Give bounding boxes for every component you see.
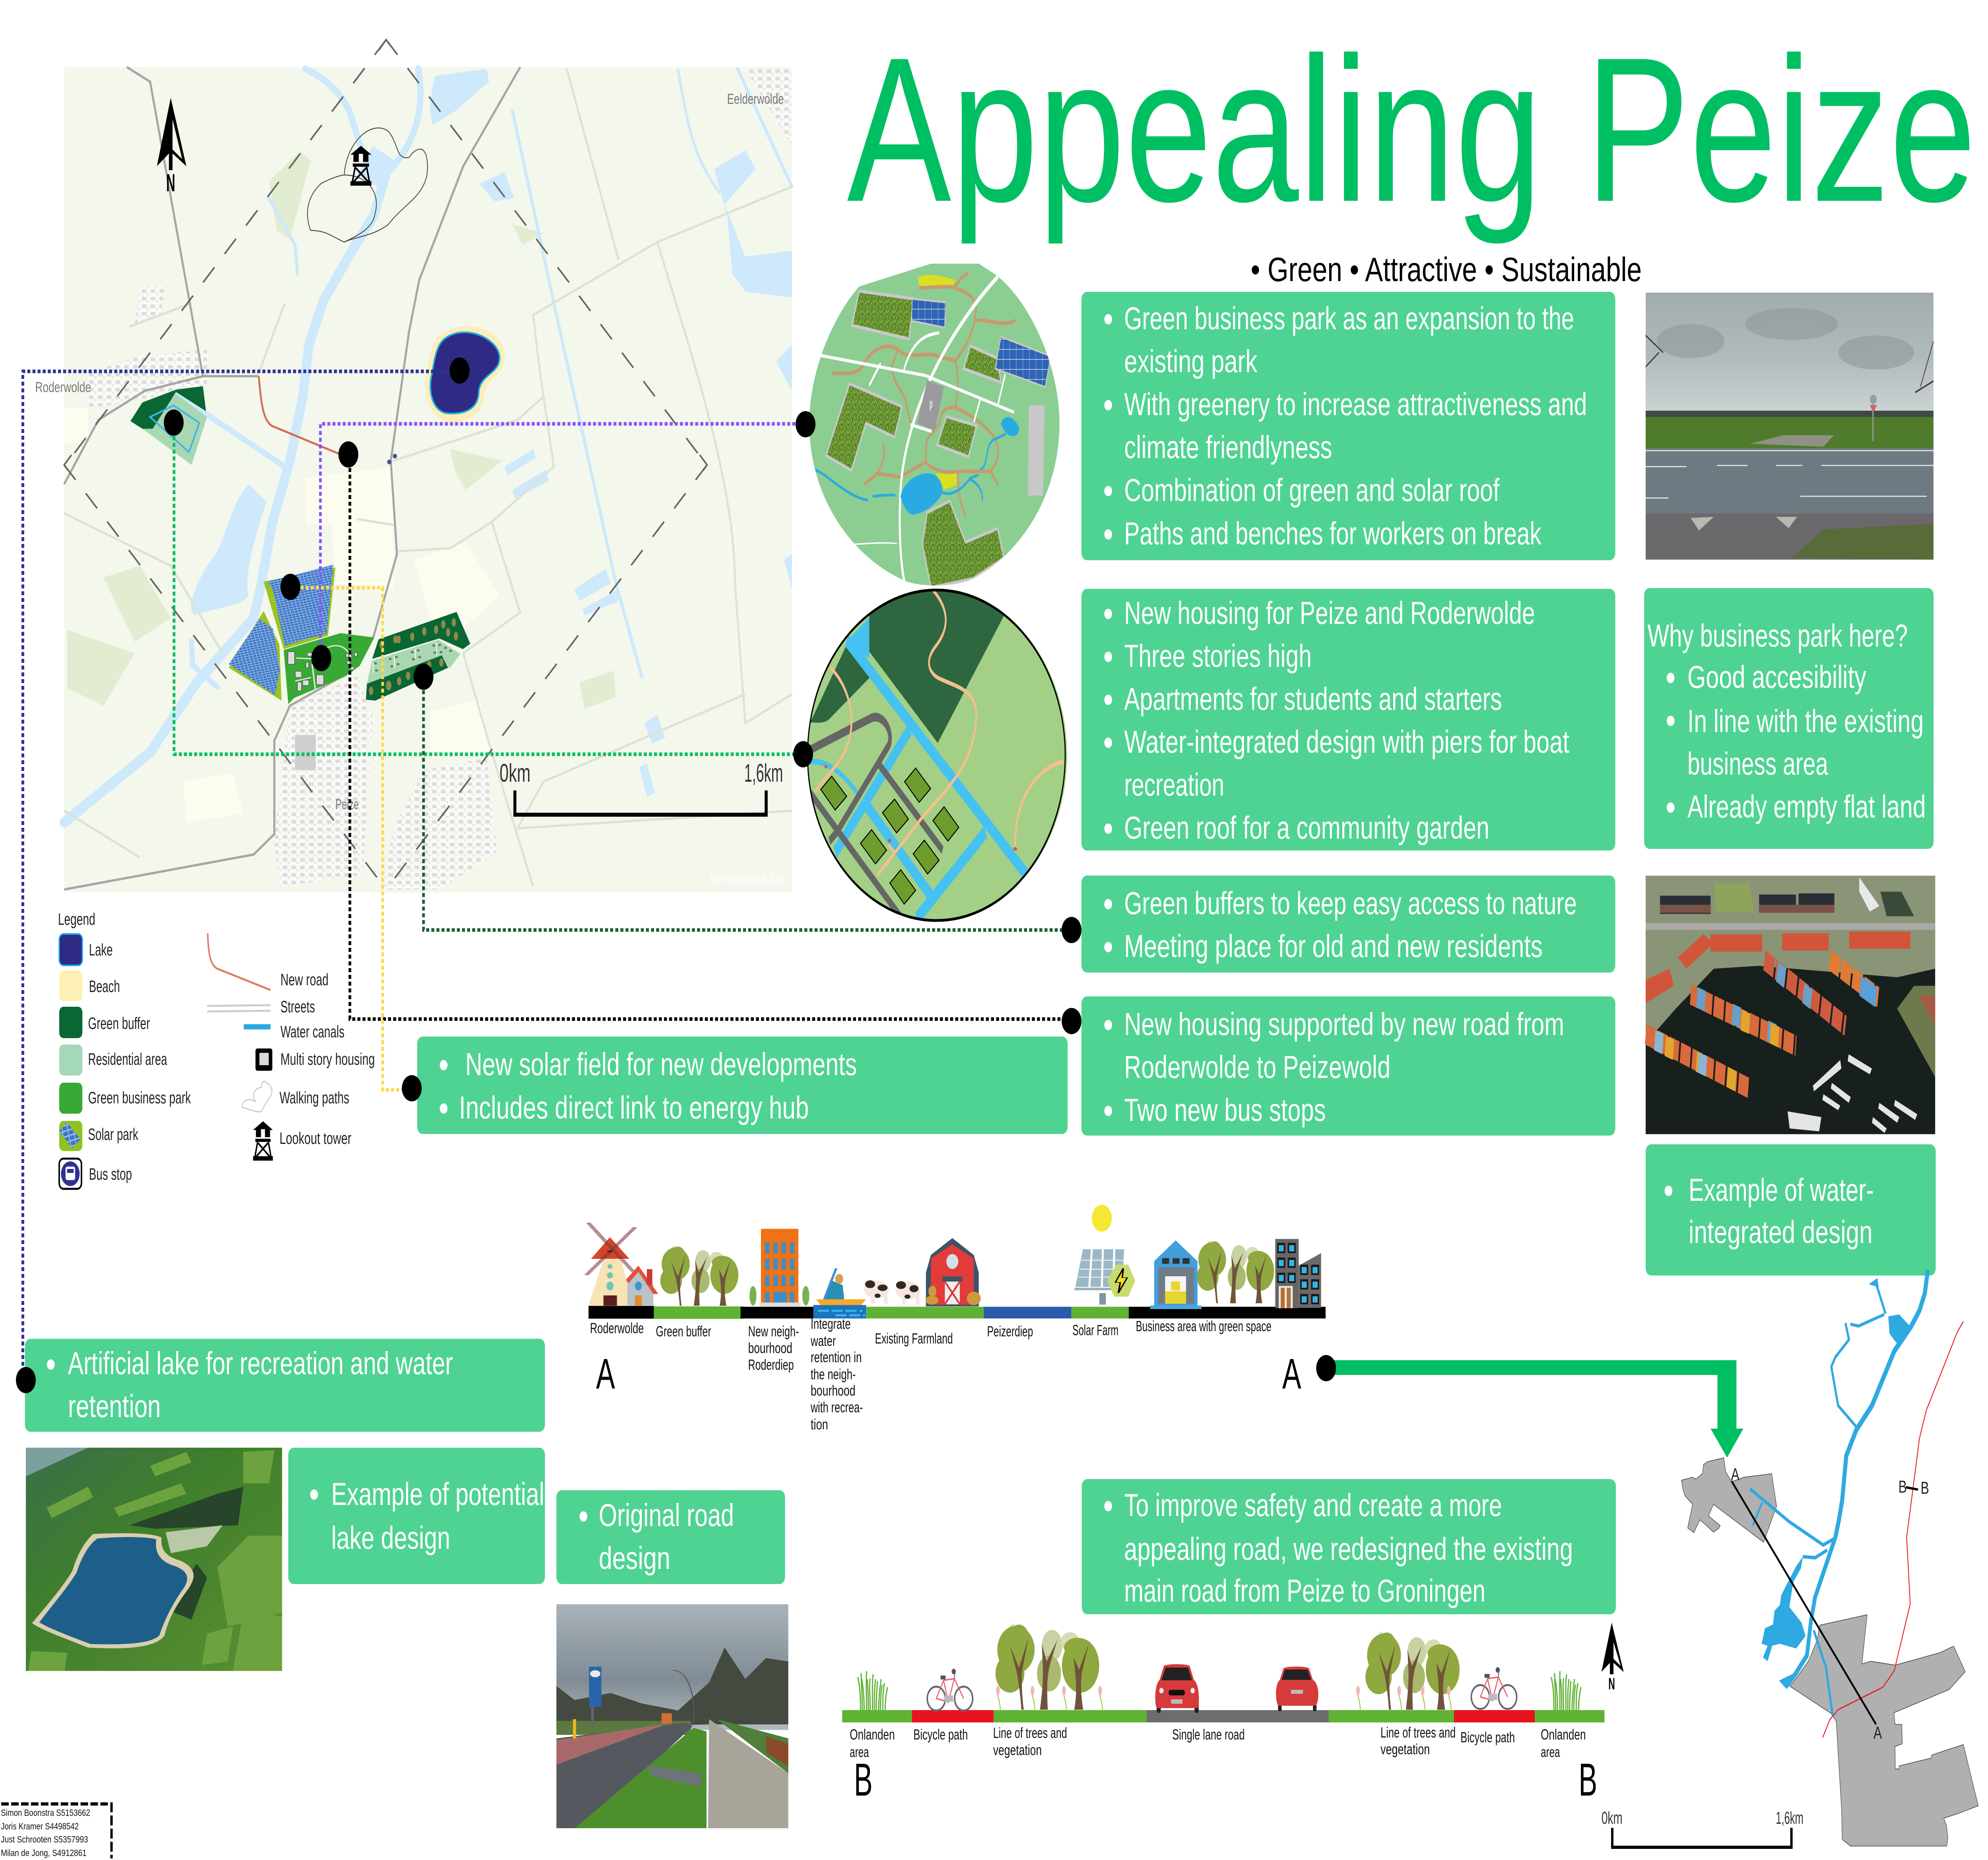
panel: why business park here: business area [1687,746,1828,782]
map place names: Eelderwolde [727,91,784,107]
icon: trees left [996,1624,1099,1710]
section B-B labels: Onlanden [1541,1726,1586,1743]
overview scale bar: 0km [1602,1809,1623,1828]
artificial lake [425,326,505,422]
circle base [808,591,1067,920]
legend: lake [59,934,113,965]
panel: green business park: With greenery to increase attractiveness and [1124,387,1587,422]
water network [1750,1270,1928,1716]
legend title: Legend [58,910,95,928]
panel: solar field: Includes direct link to energy hub [459,1090,809,1126]
section A-A labels: Roderdiep [748,1356,794,1373]
overview map [1681,1270,1978,1846]
map place names [35,91,788,886]
legend: bus stop: Bus stop [89,1165,132,1183]
icon: apartment block [749,1229,809,1307]
legend: multi story housing: Multi story housing [280,1050,375,1068]
solar field south [229,611,282,701]
panel: road redesign: To improve safety and create a more [1124,1488,1502,1523]
new housing with green buffer [366,612,470,701]
icon: trees right [1365,1632,1460,1710]
connector: lake to panel [23,371,460,1380]
panel: why business park here: Why business park here? [1647,618,1908,654]
farmland patches [64,151,616,822]
icon: trees [1197,1241,1274,1303]
section B-B labels [850,1724,1597,1806]
panel: artificial lake: retention [68,1389,161,1424]
connector: new housing [174,423,803,754]
walking paths at lookout [307,128,427,242]
section B-B labels: B [1578,1754,1597,1806]
section A-A labels: A [1282,1350,1301,1398]
legend: lookout tower: Lookout tower [280,1129,351,1147]
map scale bar: 0km [499,759,530,788]
subtitle: • Green • Attractive • Sustainable [1251,250,1642,288]
circle contents: p [930,395,933,411]
overview scale bar [1602,1809,1804,1847]
icon: flowers left [996,1686,1103,1711]
section B-B labels: Onlanden [850,1726,895,1743]
legend: solar park [59,1121,138,1151]
lookout tower icon [350,146,371,186]
legend: green buffer [59,1007,150,1038]
panel: example lake: Example of potential [331,1477,544,1512]
panel: green business park: Combination of green and solar roof [1124,473,1500,508]
section A-A labels: Existing Farmland [875,1330,953,1347]
panel: original road design: design [599,1541,670,1576]
ground bar [588,1305,1326,1319]
panel: original road design: Original road [599,1498,734,1533]
panel: example of water-integrated design: Example of water- [1689,1173,1874,1208]
section B-B labels: Line of trees and [1380,1724,1456,1741]
icon: business building [1150,1241,1202,1309]
legend: green buffer: Green buffer [88,1014,150,1033]
icon: grass right [1551,1671,1581,1710]
panel: solar field [417,1037,1068,1134]
map north arrow [157,98,186,197]
legend: green business park [59,1083,191,1114]
legend: residential area [59,1045,167,1076]
section B-B labels: B [854,1754,873,1806]
panel: artificial lake [25,1339,545,1432]
photo: original road [556,1604,788,1828]
map place names: Peize [336,796,359,812]
cross section A-A [586,1205,1326,1319]
panel: road redesign [1082,1479,1616,1614]
panel: green business park: Paths and benches for workers on break [1124,516,1541,551]
section A-A labels: the neigh- [811,1366,856,1382]
map place names: Roderwolde [35,379,91,395]
title: Appealing Peize [847,15,1976,246]
section B-B labels: vegetation [1380,1741,1430,1757]
icon: solar panel with energy hex [1074,1249,1135,1305]
section B-B labels: vegetation [993,1742,1042,1758]
main road in red [1823,1321,1963,1738]
section B-B labels: Bicycle path [1460,1729,1515,1745]
panel: new housing: Apartments for students and starters [1124,681,1502,717]
legend: green business park: Green business park [88,1088,191,1107]
panel: why business park here: In line with the existing [1687,704,1924,739]
section A-A labels: A [596,1350,615,1398]
bus stops [387,454,397,464]
panel: example of water-integrated design [1646,1144,1936,1276]
overview section labels: A [1731,1465,1740,1484]
panel: green business park: Green business park as an expansion to the [1124,301,1574,336]
green business park [283,633,374,704]
panel: why business park here: Good accesibility [1687,660,1866,695]
map place names: Esri Nederland, AHN [710,873,788,886]
panel: new road: Two new bus stops [1124,1093,1326,1128]
section B-B labels: Bicycle path [913,1726,968,1743]
panel: new housing: recreation [1124,767,1224,803]
connector: green buffer [423,677,1071,930]
circle contents [815,274,1051,588]
icon: cows [864,1280,920,1305]
legend: bus stop [59,1159,132,1189]
panel: green buffers: Green buffers to keep easy access to nature [1124,886,1577,921]
panel: green business park: climate friendlyness [1124,430,1332,465]
section A-A labels: retention in [811,1349,862,1365]
water: rivers and lakes [64,69,792,822]
section A-A labels: with recrea- [810,1399,863,1415]
circle base [809,264,1060,585]
arrow: section A to overview map [1325,1360,1743,1458]
map: solar park, business park, buffer [229,565,470,704]
panel: new housing: Water-integrated design with piers for boat [1124,724,1569,760]
legend: beach: Beach [89,977,120,996]
section A-A labels: tion [811,1416,828,1433]
panel: green business park [1081,292,1615,560]
dashed planning frame [64,40,707,889]
map north arrow: N [166,169,175,197]
section A-A labels [590,1315,1301,1433]
legend: streets: Streets [280,997,315,1016]
section A-A labels: Integrate [811,1315,850,1332]
connector: new road [350,454,1071,1019]
section A-A labels: Roderwolde [590,1320,644,1336]
credits box: Joris Kramer S4498542 [1,1822,79,1832]
section A-A labels: bourhood [811,1382,855,1399]
icon: windmill [586,1223,658,1306]
section B-B labels: area [1541,1744,1560,1760]
legend: water canals [244,1022,344,1041]
legend [58,910,375,1189]
section B-B labels: Line of trees and [993,1724,1067,1741]
overview north arrow: N [1608,1674,1615,1693]
minor roads [64,69,792,887]
photo: empty site along road [1646,293,1934,559]
legend: new road [208,933,328,990]
legend: water canals: Water canals [280,1022,344,1041]
legend: residential area: Residential area [88,1050,167,1068]
legend: lookout tower [253,1121,351,1161]
solar field north [264,565,335,649]
built-up areas [1681,1458,1978,1846]
connector dots [16,357,1336,1393]
map base [64,67,792,893]
panel: new road [1081,996,1615,1136]
overview scale bar: 1,6km [1776,1809,1804,1828]
icon: barn [926,1238,981,1307]
cross section B-B [842,1624,1604,1722]
panel: new road: New housing supported by new road from [1124,1007,1564,1042]
circle outline [808,590,1065,920]
panel: road redesign: appealing road, we redesigned the existing [1124,1532,1573,1567]
panel: example lake [288,1448,545,1584]
section A-A labels: water [810,1332,836,1349]
icon: dark buildings [1275,1239,1321,1308]
legend: lake: Lake [89,940,113,959]
photo: potential lake [26,1448,282,1671]
overview section labels: A [1873,1724,1882,1743]
ground bar [842,1710,1604,1722]
panel: example of water-integrated design: integrated design [1689,1215,1873,1250]
credits box: Simon Boonstra S5153662 [1,1808,90,1818]
legend: walking paths: Walking paths [280,1088,349,1107]
legend: multi story housing [256,1048,375,1071]
section line B-B [1906,1487,1918,1489]
icon: trees [660,1246,738,1306]
overview section labels [1731,1465,1929,1743]
panel: why business park here: Already empty flat land [1687,789,1926,825]
overview north arrow [1602,1623,1624,1693]
icon: flowers right [1356,1686,1451,1711]
panel: new housing: Three stories high [1124,639,1312,674]
panel: new housing: Green roof for a community garden [1124,810,1489,846]
section A-A labels: bourhood [748,1340,792,1356]
legend: walking paths [242,1081,349,1112]
panel: green buffers [1081,876,1615,973]
overview section labels: B [1899,1478,1907,1497]
icon: grass left [858,1671,887,1710]
section A-A labels: New neigh- [748,1323,799,1340]
panel: original road design [556,1490,785,1584]
icon: sun [1092,1205,1112,1232]
icon: car rear [1276,1667,1318,1711]
map: study area [64,40,792,893]
section line A-A [1732,1481,1876,1724]
icon: kayak [816,1268,866,1305]
Roderwolde green buffer and housing [130,386,207,465]
legend: beach [59,971,120,1001]
legend: new road: New road [280,970,328,989]
credits box [1,1804,111,1858]
panel: new road: Roderwolde to Peizewold [1124,1050,1390,1085]
section B-B labels: area [850,1744,869,1760]
icon: bicycle right [1471,1667,1517,1709]
section A-A labels: Solar Farm [1072,1322,1118,1338]
villages [88,69,792,889]
section A-A labels: Peizerdiep [987,1323,1033,1340]
business park concept circle [809,264,1060,588]
panel: green business park: existing park [1124,344,1258,379]
connector: solar field [290,588,411,1090]
connector: business park [320,424,805,658]
panel: artificial lake: Artificial lake for recreation and water [68,1346,453,1381]
credits box: Just Schrooten S5357993 [1,1835,88,1845]
section A-A labels: Green buffer [656,1323,711,1340]
map scale bar: 1,6km [744,759,783,788]
panel: road redesign: main road from Peize to Groningen [1124,1573,1485,1609]
icon: car front [1155,1664,1199,1713]
legend: solar park: Solar park [88,1125,138,1144]
legend: streets [207,997,315,1016]
icon: bicycle left [927,1669,973,1711]
section A-A labels: Business area with green space [1136,1318,1272,1334]
panel: example lake: lake design [331,1520,450,1556]
panel: new housing [1081,589,1615,850]
map scale bar [499,759,783,815]
panel: new housing: New housing for Peize and Roderwolde [1124,596,1535,631]
credits box: Milan de Jong, S4912861 [1,1848,87,1858]
overview section labels: B [1921,1479,1929,1498]
panel: green buffers: Meeting place for old and new residents [1124,929,1543,964]
section B-B labels: Single lane road [1172,1726,1244,1743]
new road [259,376,339,454]
panel: why business park here [1644,588,1934,849]
photo: waterfront housing [1646,876,1935,1134]
panel: solar field: New solar field for new developments [465,1047,857,1082]
new housing concept circle [801,590,1069,923]
main roads [64,67,520,889]
circle contents [801,590,1069,923]
